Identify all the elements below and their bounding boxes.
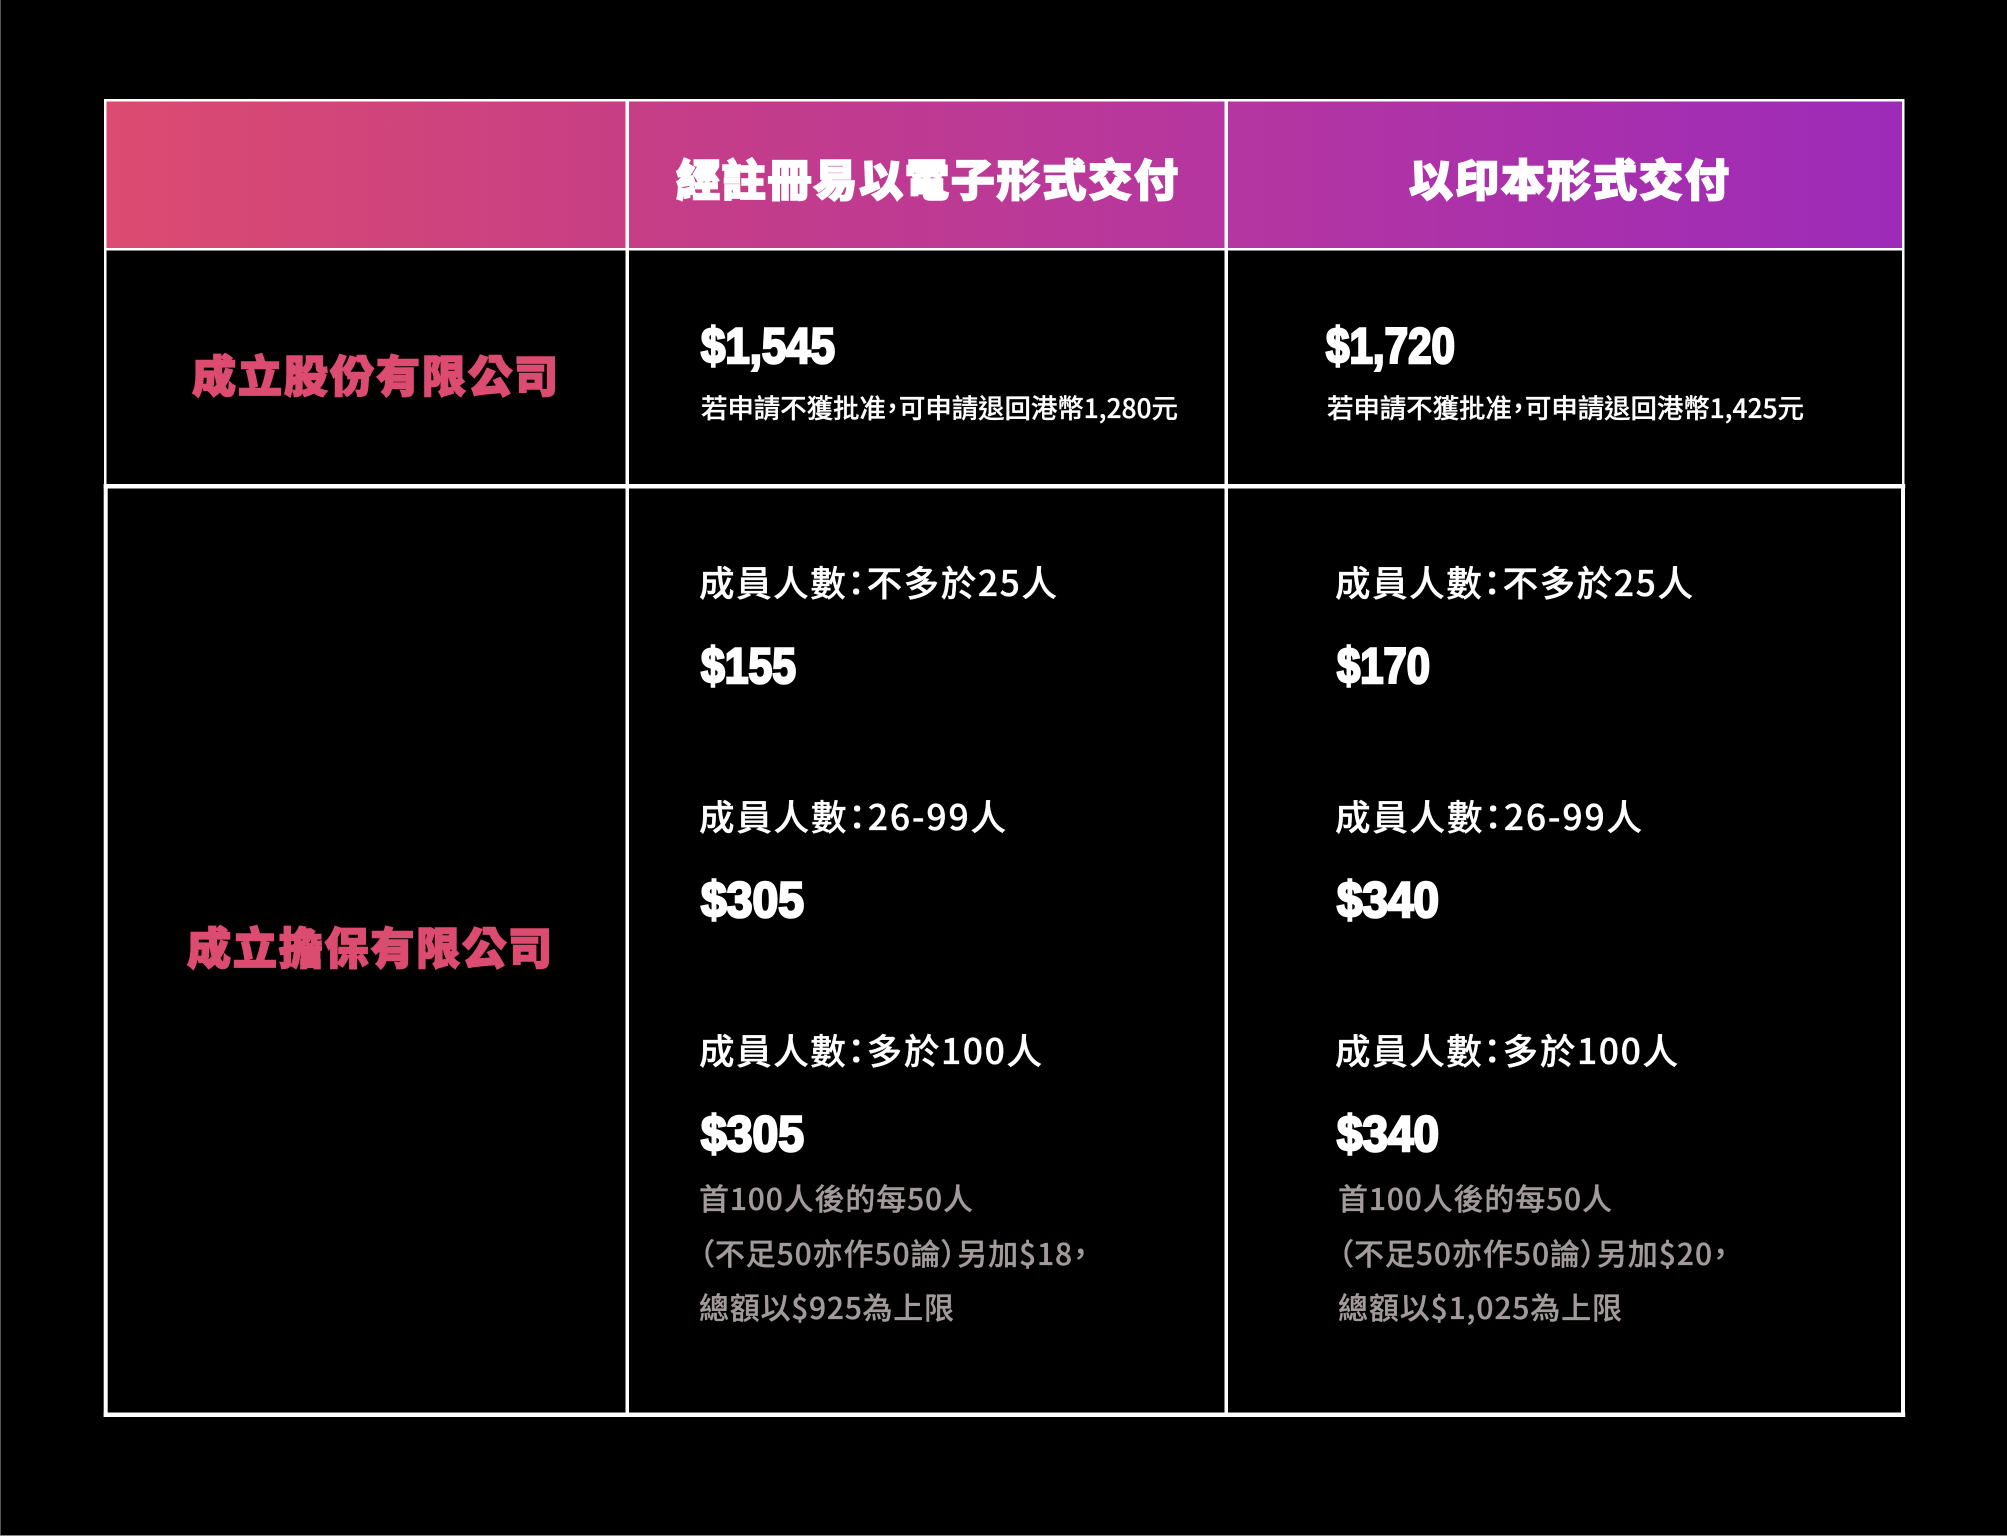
row label: company limited by guarantee: 成立擔保有限公司	[187, 913, 552, 977]
price block: shares, print	[1326, 318, 1804, 426]
price block: guarantee, electronic: $305	[701, 1106, 804, 1162]
price block: guarantee, electronic: 首100人後的每50人	[699, 1175, 973, 1219]
price block: guarantee, print: $340	[1337, 1106, 1439, 1162]
price block: shares, print: 若申請不獲批准，可申請退回港幣1,425元	[1327, 387, 1804, 426]
heading: print delivery: 以印本形式交付	[1409, 145, 1729, 209]
price block: shares, print: $1,720	[1326, 318, 1455, 374]
price block: guarantee, print: 首100人後的每50人	[1338, 1175, 1612, 1219]
price block: guarantee, print: 成員人數：26-99人	[1335, 790, 1642, 841]
price block: guarantee, electronic: 成員人數：不多於25人	[699, 556, 1057, 607]
price block: guarantee, electronic	[699, 556, 1088, 1328]
table header band	[105, 100, 1903, 249]
price block: guarantee, print: 成員人數：多於100人	[1335, 1024, 1678, 1075]
price block: guarantee, print: 總額以$1,025為上限	[1338, 1284, 1622, 1328]
price block: guarantee, electronic: 成員人數：26-99人	[699, 790, 1006, 841]
price block: guarantee, electronic: $305	[701, 872, 804, 928]
price block: guarantee, electronic: 總額以$925為上限	[699, 1284, 954, 1328]
price block: guarantee, print: （不足50亦作50論）另加$20，	[1338, 1230, 1728, 1274]
row label: company limited by shares: 成立股份有限公司	[192, 341, 558, 405]
table grid	[104, 99, 1905, 1417]
heading: electronic delivery: 經註冊易以電子形式交付	[676, 145, 1178, 209]
price block: guarantee, print: $170	[1337, 638, 1430, 694]
price block: guarantee, print: $340	[1337, 872, 1439, 928]
price block: shares, electronic	[701, 318, 1178, 426]
price block: shares, electronic: $1,545	[701, 318, 835, 374]
price block: shares, electronic: 若申請不獲批准，可申請退回港幣1,280元	[701, 387, 1178, 426]
price block: guarantee, print: 成員人數：不多於25人	[1335, 556, 1693, 607]
price block: guarantee, electronic: $155	[701, 638, 796, 694]
price block: guarantee, electronic: 成員人數：多於100人	[699, 1024, 1042, 1075]
price block: guarantee, print	[1335, 556, 1728, 1328]
price block: guarantee, electronic: （不足50亦作50論）另加$18，	[699, 1230, 1088, 1274]
